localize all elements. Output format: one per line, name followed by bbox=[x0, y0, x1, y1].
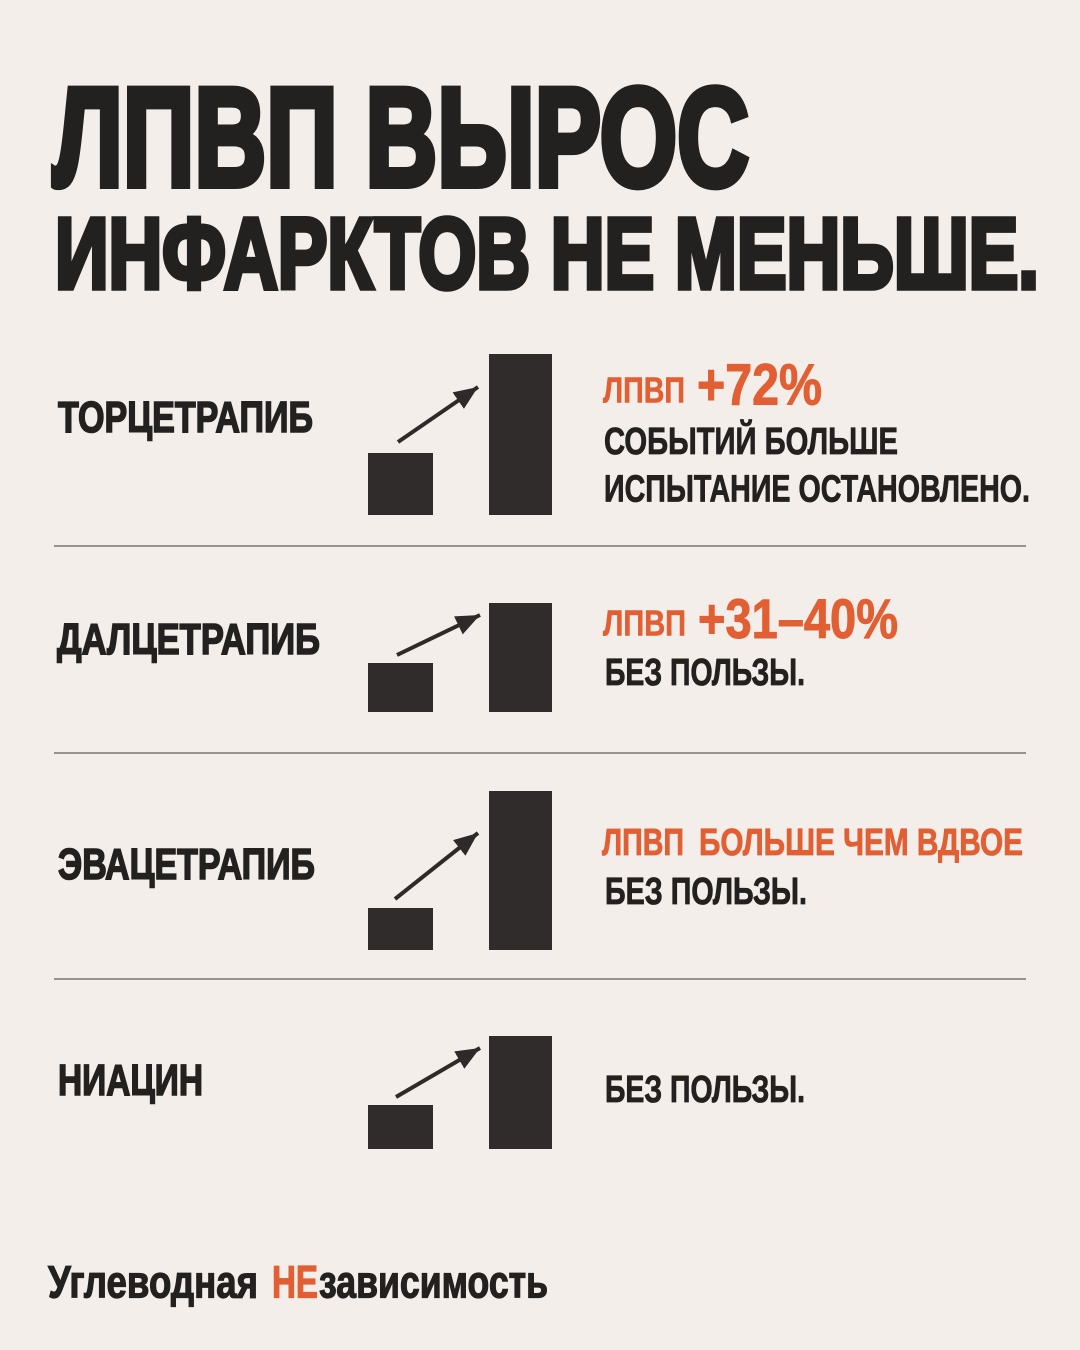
footer brand: НЕ bbox=[272, 1256, 318, 1308]
panel: evacetrapib bbox=[58, 791, 1023, 950]
result text bbox=[603, 587, 898, 694]
title bbox=[53, 58, 1039, 310]
footer brand: зависимость bbox=[319, 1256, 548, 1308]
footer brand bbox=[48, 1256, 548, 1308]
title: ЛПВП ВЫРОС bbox=[53, 58, 749, 216]
bar chart bbox=[368, 1036, 552, 1149]
result text bbox=[602, 822, 1023, 913]
result text: БЕЗ ПОЛЬЗЫ. bbox=[605, 871, 807, 913]
drug name: ТОРЦЕТРАПИБ bbox=[58, 393, 313, 442]
panel: dalcetrapib bbox=[57, 587, 898, 712]
result text: ЛПВП bbox=[602, 822, 684, 864]
drug name: ЭВАЦЕТРАПИБ bbox=[58, 840, 315, 889]
result text: ЛПВП bbox=[603, 370, 685, 410]
panel: niacin bbox=[58, 1036, 805, 1149]
result text: БЕЗ ПОЛЬЗЫ. bbox=[605, 1069, 805, 1111]
panel: torcetrapib bbox=[58, 352, 1030, 515]
drug name: НИАЦИН bbox=[58, 1056, 203, 1105]
result text: СОБЫТИЙ БОЛЬШЕ bbox=[604, 418, 898, 463]
result text: ЛПВП bbox=[603, 602, 686, 644]
bar chart bbox=[368, 354, 552, 515]
drug name: ДАЛЦЕТРАПИБ bbox=[57, 615, 320, 664]
result text: +72% bbox=[697, 352, 822, 418]
result text: +31–40% bbox=[698, 587, 898, 650]
result text: БЕЗ ПОЛЬЗЫ. bbox=[605, 652, 805, 694]
result text bbox=[603, 352, 1030, 510]
bar chart bbox=[368, 791, 552, 950]
bar chart bbox=[368, 603, 552, 712]
footer brand: Углеводная bbox=[48, 1256, 258, 1308]
